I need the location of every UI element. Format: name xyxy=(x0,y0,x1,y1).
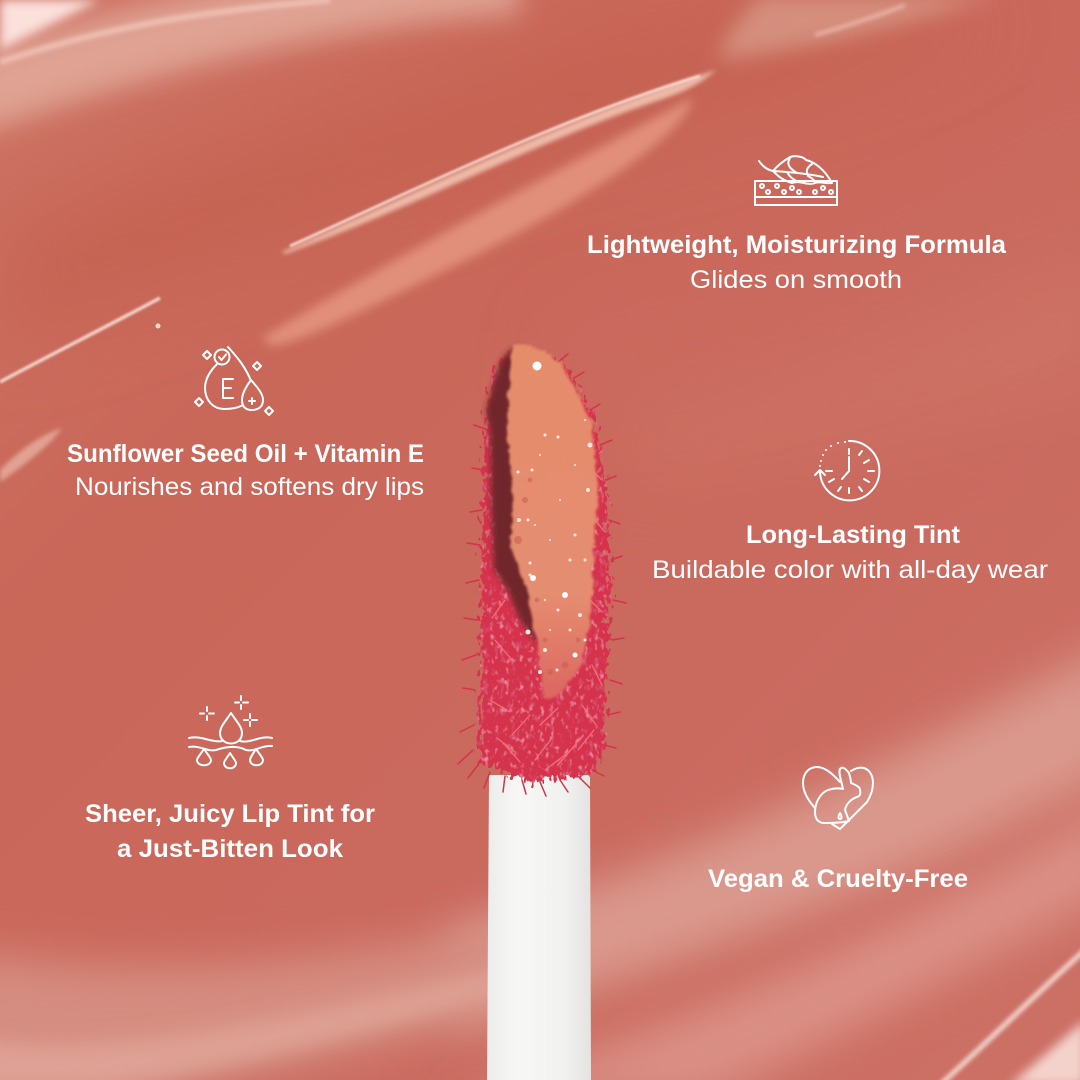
heading: Lightweight, Moisturizing Formula xyxy=(587,231,1007,259)
gloss highlights xyxy=(516,362,592,674)
description: Nourishes and softens dry lips xyxy=(75,473,424,501)
heading line two: a Just-Bitten Look xyxy=(117,835,343,863)
feature: long-lasting tint xyxy=(652,441,1048,584)
heading: Long-Lasting Tint xyxy=(746,521,961,549)
heading: Sunflower Seed Oil + Vitamin E xyxy=(67,440,424,468)
red flocked applicator tip xyxy=(458,350,626,796)
icon: oil drops with E xyxy=(195,347,273,415)
peach gloss formula xyxy=(507,345,597,700)
feature: lightweight formula xyxy=(587,156,1007,294)
dark shadow on left of tip xyxy=(486,346,538,645)
darker bumps in gloss xyxy=(514,478,580,675)
heading: Sheer, Juicy Lip Tint for xyxy=(85,800,375,828)
icon: heart with rabbit xyxy=(803,767,873,829)
white wand stem xyxy=(487,775,591,1080)
icon: water drops and skin layers xyxy=(189,696,272,768)
icon: leaf on skin layer xyxy=(755,156,837,205)
heading: Vegan & Cruelty-Free xyxy=(708,865,968,893)
feature: sunflower seed oil and vitamin E xyxy=(67,347,424,501)
description: Glides on smooth xyxy=(690,266,902,294)
lip tint applicator wand xyxy=(458,345,626,1080)
feature: sheer juicy lip tint xyxy=(85,696,375,863)
description: Buildable color with all-day wear xyxy=(652,556,1048,584)
feature: vegan and cruelty-free xyxy=(708,767,968,893)
icon: clock with arrow xyxy=(815,441,879,500)
